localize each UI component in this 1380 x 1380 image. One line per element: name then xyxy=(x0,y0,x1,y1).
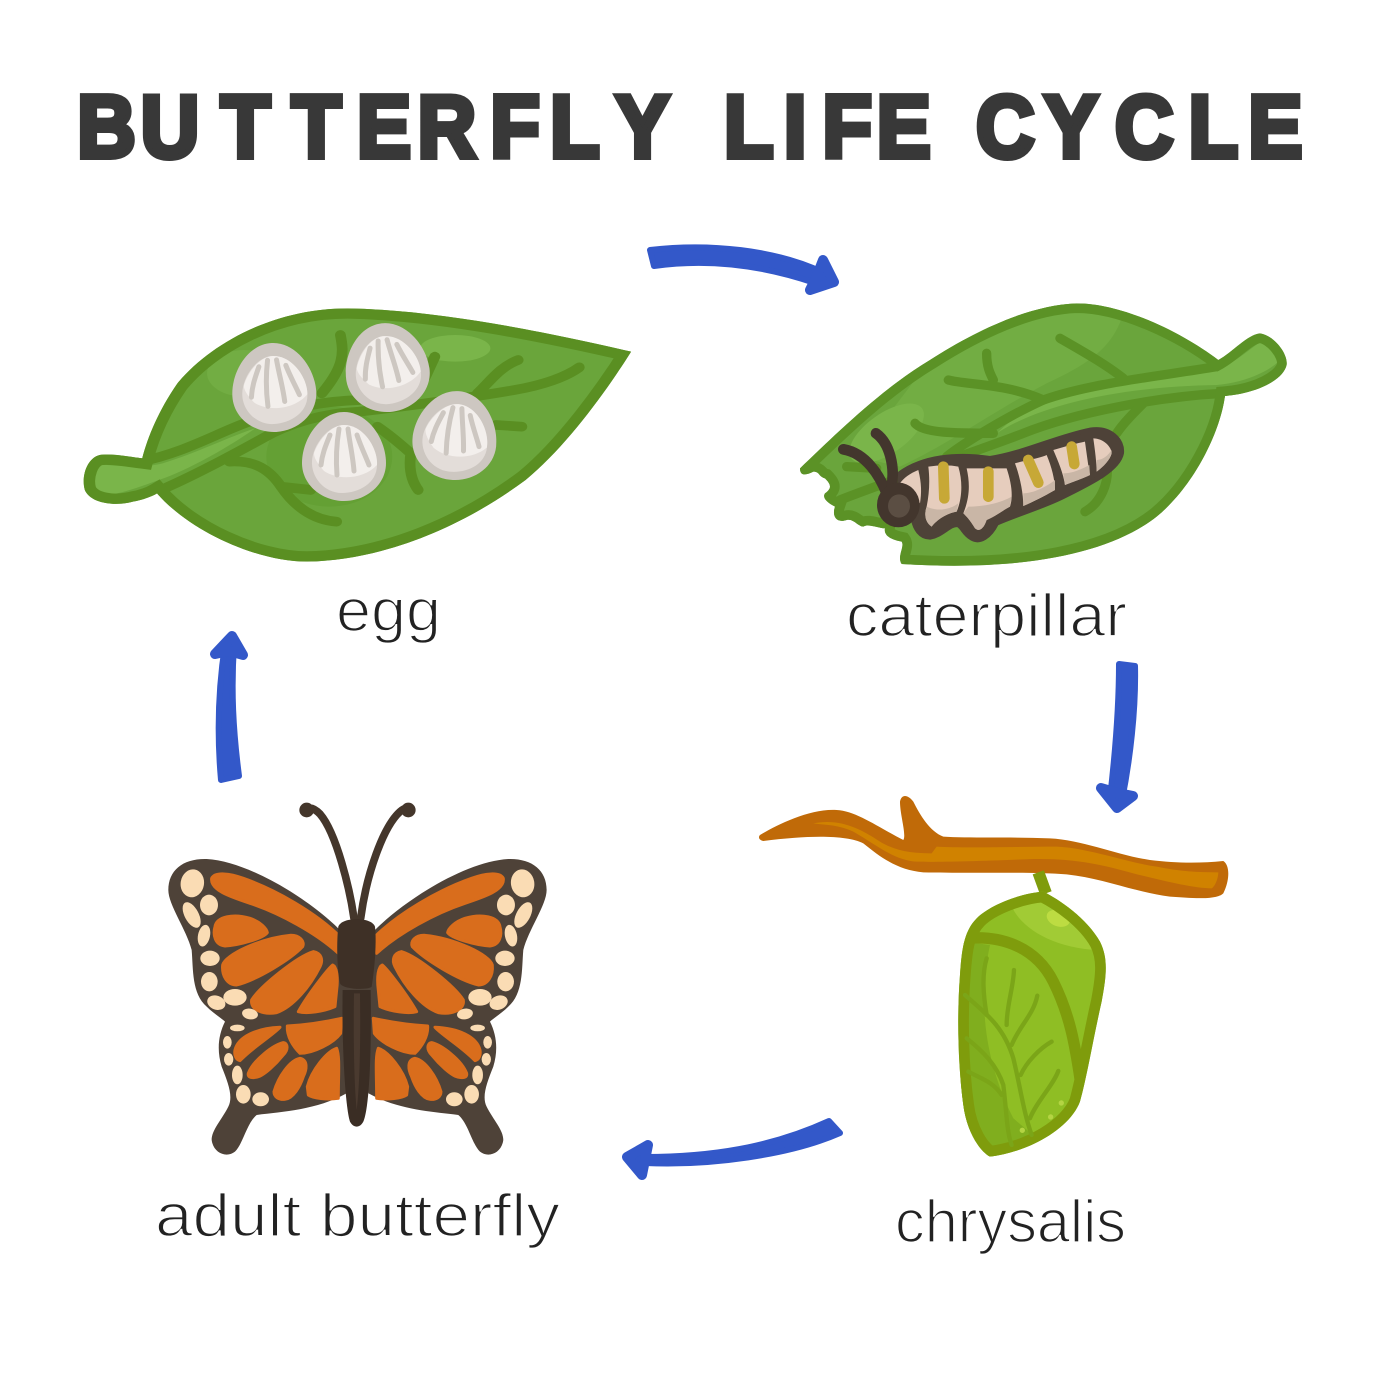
eggs xyxy=(230,318,501,501)
label: caterpillar: caterpillar xyxy=(846,582,1127,649)
arrow: caterpillar to chrysalis xyxy=(1101,664,1135,808)
adult butterfly xyxy=(168,803,547,1155)
leaf: egg leaf xyxy=(84,308,632,562)
label: adult butterfly: adult butterfly xyxy=(155,1182,560,1249)
egg stage: leaf with eggs xyxy=(84,308,632,562)
caterpillar stage: leaf with caterpillar xyxy=(800,303,1287,566)
chrysalis stage: branch and chrysalis xyxy=(759,796,1228,1162)
label: egg: egg xyxy=(336,577,441,644)
label: chrysalis: chrysalis xyxy=(895,1188,1126,1255)
arrow: egg to caterpillar xyxy=(650,247,834,290)
left wings xyxy=(168,859,358,1155)
caterpillar xyxy=(843,429,1122,540)
title: BUTTERFLY LIFE CYCLE xyxy=(77,77,1302,176)
arrow: adult butterfly to egg xyxy=(215,636,243,780)
leaf: caterpillar leaf xyxy=(800,303,1287,566)
arrow: chrysalis to adult butterfly xyxy=(627,1121,840,1175)
antennae xyxy=(299,803,416,918)
body xyxy=(337,919,376,1127)
chrysalis xyxy=(958,870,1106,1157)
right wings xyxy=(357,859,547,1155)
branch xyxy=(759,796,1228,898)
